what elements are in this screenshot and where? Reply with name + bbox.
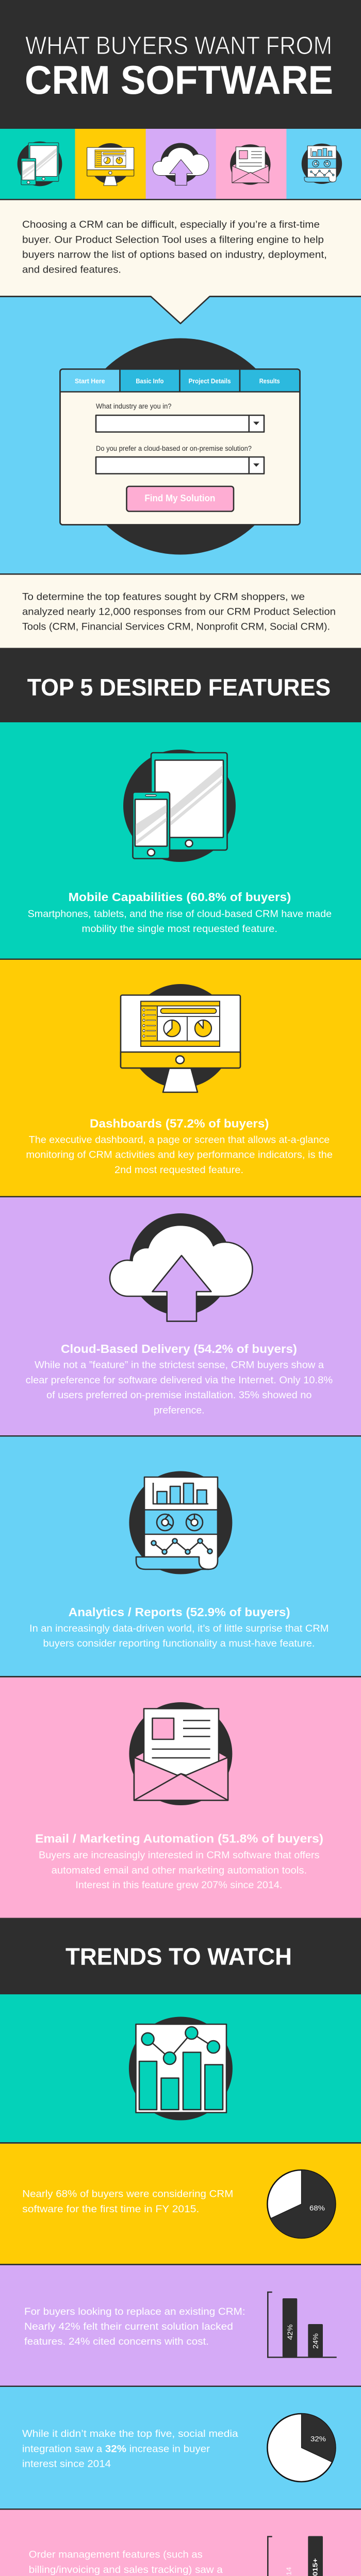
bar chart 2014 vs 2015+ <box>268 2536 337 2576</box>
text: replacing a CRM: Nearly 42% felt their current solution lacked <box>24 2321 233 2332</box>
text: dashboards <box>26 1116 333 1176</box>
icon: analytics report <box>129 1471 232 1574</box>
text: order management: billing/invoicing and sales tracking) saw a <box>29 2565 223 2575</box>
text: social media integration: interest since 2014 <box>22 2459 111 2470</box>
title line 2: CRM SOFTWARE <box>25 57 333 103</box>
form window: Results <box>259 377 280 385</box>
text: mobile capabilities: mobility the single most requested feature. <box>81 924 277 935</box>
button: Find My Solution <box>144 493 215 503</box>
text: first-time buyers: Nearly 68% of buyers were considering CRM <box>22 2189 233 2199</box>
panel: email and marketing automation <box>0 1677 361 1918</box>
text: cloud-based delivery: of users preferred on-premise installation. 35% showed no <box>46 1390 311 1401</box>
text: dashboards: 2nd most requested feature. <box>114 1165 243 1176</box>
bar chart 42% and 24%: 24% <box>311 2333 320 2349</box>
text: analytics and reports <box>29 1605 329 1649</box>
text: email and marketing automation: automated email and other marketing automation tools. <box>52 1865 307 1876</box>
icon: dashboard monitor <box>121 984 240 1092</box>
panel: dashboards <box>0 960 361 1197</box>
panel: mobile capabilities <box>0 722 361 960</box>
text: social media integration: While it didn’t make the top five, social media <box>22 2429 238 2439</box>
heading: trends to watch <box>0 1918 361 1995</box>
form window: Project Details <box>189 377 231 385</box>
text: mobile capabilities: Smartphones, tablets, and the rise of cloud-based CRM have made <box>28 909 332 920</box>
text: analytics and reports: In an increasingly data-driven world, it’s of little surprise that CRM <box>29 1623 329 1634</box>
text: cloud-based delivery: preference. <box>154 1405 205 1416</box>
tab: start here <box>61 369 120 392</box>
panel: product selection tool <box>0 296 361 575</box>
text: email and marketing automation: Interest in this feature grew 207% since 2014. <box>75 1880 282 1891</box>
question 1: What industry are you in? <box>96 402 171 410</box>
text: email and marketing automation: Buyers are increasingly interested in CRM software that offers <box>39 1850 320 1861</box>
question 2: Do you prefer a cloud-based or on-premise solution? <box>96 445 252 452</box>
icon: band dashboard <box>87 143 134 185</box>
heading: top 5 desired features: TOP 5 DESIRED FEATURES <box>27 674 331 701</box>
text: dashboards: The executive dashboard, a page or screen that allows at-a-glance <box>29 1134 330 1145</box>
panel: social media integration <box>0 2387 361 2510</box>
button <box>127 486 234 511</box>
text: order management <box>29 2550 233 2576</box>
dropdown 1 <box>96 415 264 432</box>
panel: first-time buyers <box>0 2144 361 2265</box>
text: email and marketing automation: Email / Marketing Automation (51.8% of buyers) <box>35 1832 323 1845</box>
heading: top 5 desired features <box>0 648 361 722</box>
icon: band cloud <box>153 143 209 185</box>
intro text: buyers narrow the list of options based on industry, deployment, <box>22 250 327 261</box>
dropdown 2 <box>96 457 264 474</box>
text: mobile capabilities <box>28 890 332 935</box>
text: dashboards: monitoring of CRM activities and key performance indicators, is the <box>26 1150 333 1161</box>
header panel <box>0 0 361 129</box>
text: replacing a CRM: For buyers looking to replace an existing CRM: <box>24 2307 245 2317</box>
form window: Start Here <box>75 377 105 385</box>
method text <box>22 591 336 633</box>
text: first-time buyers <box>22 2189 233 2215</box>
form window <box>60 369 300 524</box>
icon: cloud upload <box>110 1213 253 1321</box>
text: cloud-based delivery: Cloud-Based Delivery (54.2% of buyers) <box>61 1342 297 1355</box>
colour band with five feature icons <box>0 129 361 200</box>
text: dashboards: Dashboards (57.2% of buyers) <box>90 1116 269 1130</box>
text: cloud-based delivery: clear preference for software delivered via the Internet. Only 10.8% <box>26 1375 333 1386</box>
text: first-time buyers: software for the first time in FY 2015. <box>22 2204 199 2215</box>
panel: cloud-based delivery <box>0 1197 361 1437</box>
icon: tablet and phone <box>123 750 236 862</box>
icon: email envelope <box>129 1702 232 1805</box>
icon: band analytics <box>302 144 342 184</box>
tabs: inactive <box>120 369 299 392</box>
text: replacing a CRM: features. 24% cited concerns with cost. <box>24 2336 209 2347</box>
text: social media integration: integration saw a 32% increase in buyer <box>22 2444 210 2454</box>
form window: Basic Info <box>136 377 163 385</box>
title line 1: WHAT BUYERS WANT FROM <box>25 32 332 60</box>
text: cloud-based delivery: While not a ”feature” in the strictest sense, CRM buyers show a <box>35 1360 324 1371</box>
method text: analyzed nearly 12,000 responses from our CRM Product Selection <box>22 607 336 618</box>
icon: band email <box>230 144 271 185</box>
text: cloud-based delivery <box>26 1342 333 1416</box>
pie chart 68% <box>267 2170 336 2238</box>
panel: order management <box>0 2510 361 2576</box>
icon: combo chart <box>136 2024 226 2112</box>
text: order management: Order management features (such as <box>29 2550 203 2561</box>
pie chart 68%: 68% <box>309 2204 325 2212</box>
method text: Tools (CRM, Financial Services CRM, Nonprofit CRM, Social CRM). <box>22 621 330 633</box>
heading: trends to watch: TRENDS TO WATCH <box>65 1943 292 1970</box>
panel: analytics and reports <box>0 1436 361 1677</box>
text: analytics and reports: Analytics / Reports (52.9% of buyers) <box>69 1605 290 1619</box>
text: social media integration <box>22 2429 238 2470</box>
text: email and marketing automation <box>35 1832 323 1891</box>
panel: trends icon <box>0 1994 361 2144</box>
bar chart 42% and 24%: 42% <box>286 2325 294 2340</box>
dark circle backdrop <box>72 338 289 554</box>
method text: To determine the top features sought by CRM shoppers, we <box>22 591 305 603</box>
panel: replacing a CRM <box>0 2265 361 2387</box>
notch arrow <box>151 296 210 324</box>
pie chart 32% <box>267 2413 336 2482</box>
intro text: buyer. Our Product Selection Tool uses a filtering engine to help <box>22 235 324 245</box>
text: replacing a CRM <box>24 2307 245 2347</box>
intro text <box>22 219 327 276</box>
pie chart 32%: 32% <box>310 2435 326 2443</box>
intro text: and desired features. <box>22 265 121 276</box>
icon: band mobile <box>18 142 62 186</box>
intro text: Choosing a CRM can be difficult, especially if you’re a first-time <box>22 219 320 230</box>
text: mobile capabilities: Mobile Capabilities (60.8% of buyers) <box>69 890 291 904</box>
bar chart 42% and 24% <box>268 2292 337 2358</box>
text: analytics and reports: buyers consider reporting functionality a must-have feature. <box>43 1638 315 1649</box>
